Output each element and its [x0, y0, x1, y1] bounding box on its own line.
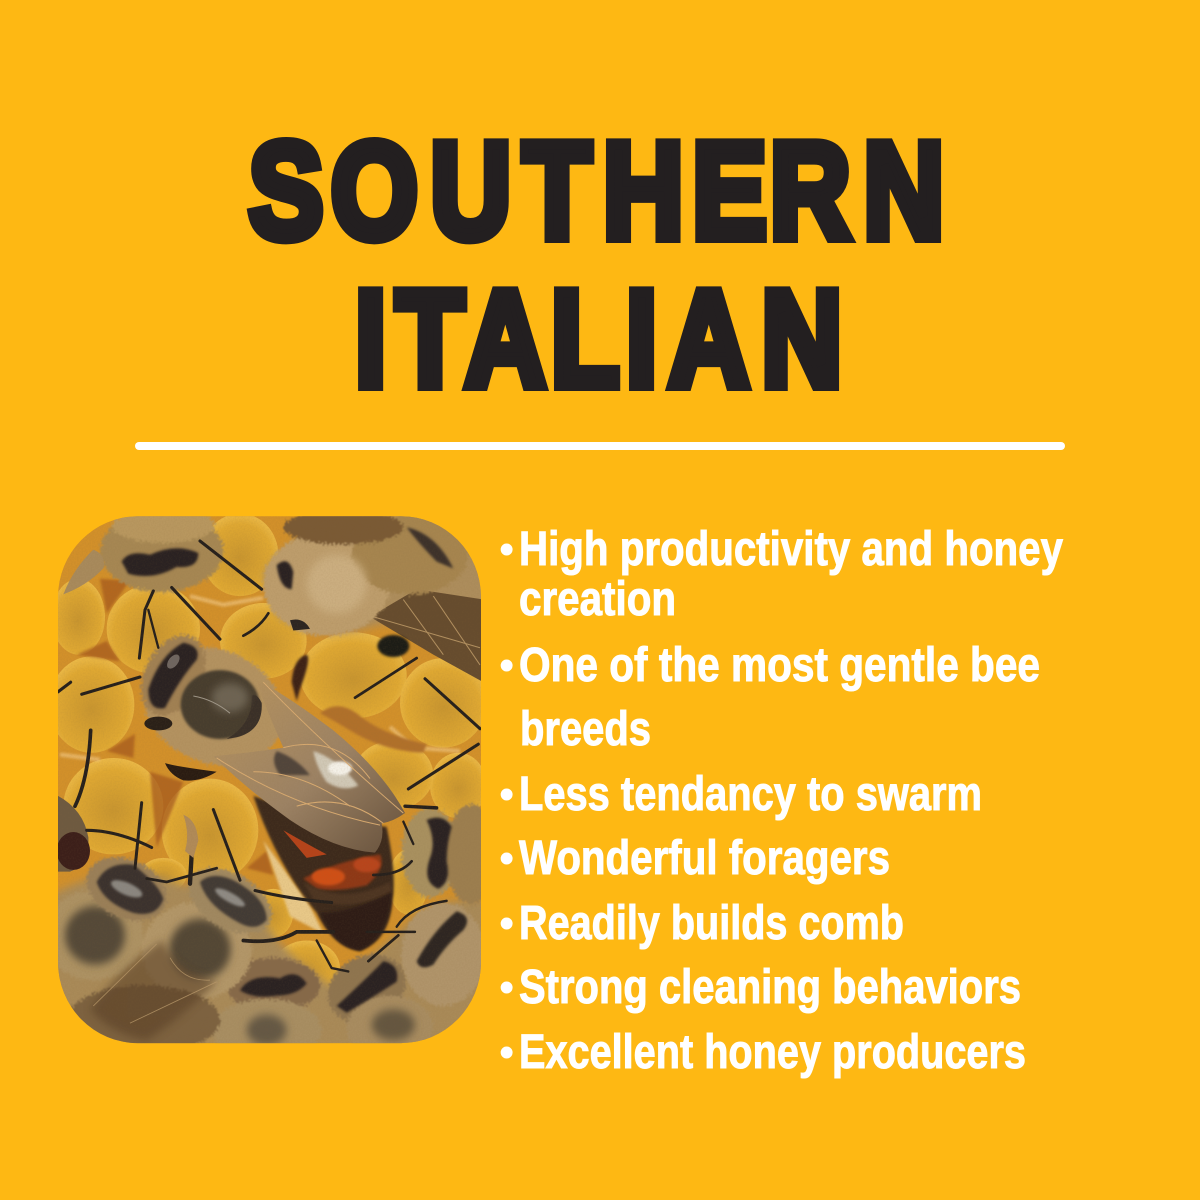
bee: bottom right: [327, 951, 432, 1044]
bee: top right: [370, 589, 483, 682]
item: swarm: •: [500, 774, 513, 816]
comb ridges: [60, 596, 460, 760]
dark comb shadow: [292, 655, 308, 701]
queen abdomen: [253, 796, 394, 951]
item: comb: Readily builds comb: [519, 897, 904, 950]
title: [246, 115, 944, 415]
item: gentle: breeds: [520, 703, 651, 756]
bee: left thorax pair: [58, 890, 253, 1044]
honeycomb cells: [58, 516, 481, 984]
item: cleaning: •: [500, 967, 513, 1009]
bee: bottom center: [214, 955, 322, 1044]
item: foragers: •: [500, 838, 513, 880]
photo: bees on honeycomb: [58, 516, 481, 1044]
title: ITALIAN: [355, 263, 842, 415]
queen head: [148, 643, 198, 708]
queen shiny thorax: [181, 670, 259, 739]
dark patch below queen: [165, 763, 217, 781]
merged bee mass at bottom: [50, 874, 490, 1050]
main queen: side leg: [320, 706, 427, 753]
queen wings: [213, 680, 405, 853]
bullet list: [500, 523, 1064, 1079]
item: gentle: [500, 639, 1040, 756]
item: honey producers: •: [500, 1032, 513, 1074]
worker heads bottom left: [84, 854, 274, 934]
item: productivity: •: [500, 529, 513, 571]
wing fragment top left: [63, 550, 104, 594]
pale wax beside abdomen: [263, 841, 323, 934]
merged bee mass at top right: [263, 510, 490, 633]
bee: top left: [100, 508, 223, 592]
bee: right lower: [402, 903, 485, 1006]
divider line: [135, 442, 1065, 450]
antennae and legs: [58, 541, 480, 971]
queen thorax fuzz: [139, 632, 280, 768]
item: comb: •: [500, 903, 513, 945]
bee: left edge: [58, 796, 88, 872]
bee: right head: [399, 802, 481, 905]
item: productivity: creation: [519, 573, 676, 626]
photo grain: [59, 516, 480, 1000]
item: productivity: [500, 523, 1063, 626]
item: foragers: Wonderful foragers: [519, 832, 890, 885]
item: swarm: Less tendancy to swarm: [519, 768, 982, 821]
tan foreleg: [183, 815, 198, 858]
title: SOUTHERN: [249, 115, 944, 267]
item: gentle: •: [500, 645, 513, 687]
